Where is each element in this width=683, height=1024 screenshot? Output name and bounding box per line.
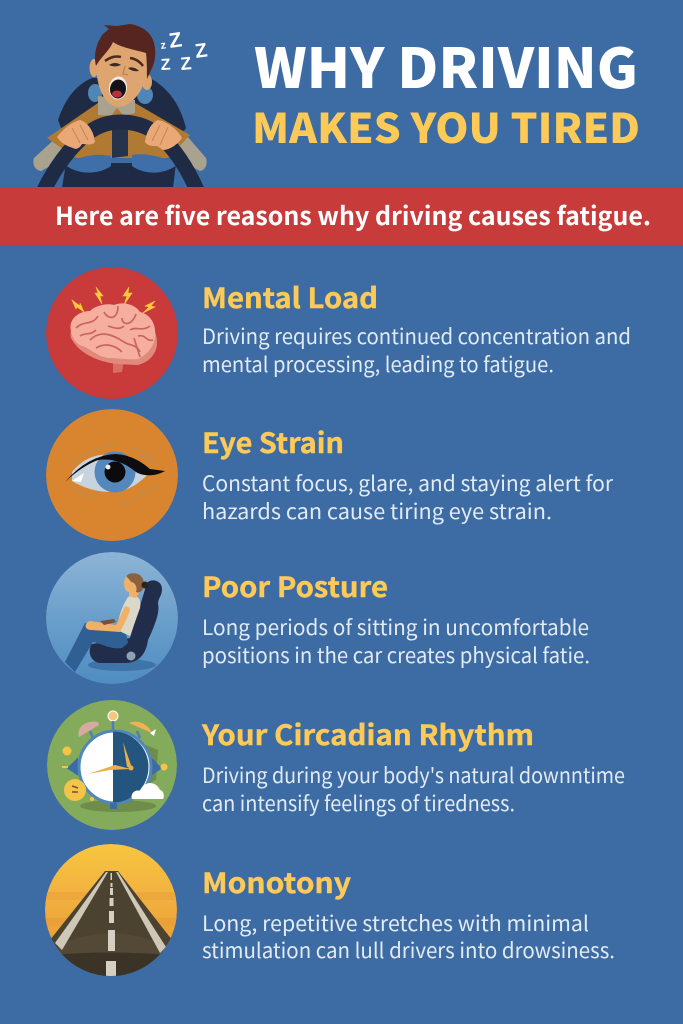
description bbox=[202, 321, 631, 379]
sleep Z marks bbox=[160, 32, 208, 70]
hands bbox=[57, 120, 95, 149]
brows and eyes bbox=[105, 56, 121, 61]
icon: seated driver bbox=[46, 552, 178, 684]
sleeves bbox=[33, 142, 62, 171]
description: Constant focus, glare, and staying alert for bbox=[202, 468, 614, 498]
heading: Your Circadian Rhythm bbox=[201, 714, 534, 754]
title: WHY DRIVING bbox=[254, 24, 638, 104]
description: Long, repetitive stretches with minimal bbox=[202, 908, 589, 938]
title: MAKES YOU TIRED bbox=[252, 95, 640, 155]
icon: straight road at sunset bbox=[45, 844, 177, 990]
description bbox=[202, 468, 614, 526]
panel: mental load bbox=[46, 267, 631, 399]
description: Driving during your body's natural downntime bbox=[202, 760, 625, 790]
bells bbox=[78, 722, 99, 737]
icon: alarm clock day and night bbox=[47, 700, 177, 830]
lightning bolts bbox=[72, 300, 84, 312]
description: positions in the car creates physical fatie. bbox=[202, 640, 590, 670]
heading: Eye Strain bbox=[202, 422, 344, 462]
lane lines bbox=[55, 872, 108, 950]
description: can intensify feelings of tiredness. bbox=[202, 788, 515, 818]
steering wheel hub bbox=[62, 163, 176, 188]
title bbox=[252, 24, 640, 155]
sleep Z marks: Z bbox=[167, 28, 184, 53]
description: mental processing, leading to fatigue. bbox=[202, 349, 554, 379]
torso bbox=[117, 596, 140, 636]
sleepy sun bbox=[64, 779, 86, 801]
collar bbox=[98, 96, 135, 116]
panel: monotony bbox=[45, 844, 615, 990]
steering wheel rim bbox=[44, 122, 197, 190]
description: stimulation can lull drivers into drowsiness. bbox=[202, 935, 615, 965]
panel: poor posture bbox=[46, 552, 590, 684]
shirt bbox=[47, 103, 190, 158]
panel: circadian rhythm bbox=[47, 700, 625, 830]
description: Long periods of sitting in uncomfortable bbox=[202, 612, 589, 642]
clock hands bbox=[88, 765, 131, 774]
car seat bbox=[58, 78, 186, 132]
panel: eye strain bbox=[46, 409, 614, 541]
legs bbox=[65, 623, 128, 672]
head bbox=[90, 24, 155, 107]
sleep Z marks: Z bbox=[160, 56, 171, 74]
heading: Poor Posture bbox=[202, 566, 388, 606]
description: Driving requires continued concentration and bbox=[202, 321, 631, 351]
description: hazards can cause tiring eye strain. bbox=[202, 496, 552, 526]
icon: eye bbox=[46, 409, 178, 541]
hair bbox=[95, 24, 155, 79]
description bbox=[202, 760, 625, 818]
sleep Z marks: Z bbox=[194, 39, 209, 63]
side wings bbox=[70, 762, 76, 772]
cloud bbox=[132, 783, 164, 799]
yawning mouth bbox=[108, 76, 128, 100]
icon: brain with lightning bolts bbox=[46, 267, 178, 399]
seat bbox=[90, 580, 162, 663]
sleep Z marks: z bbox=[160, 39, 167, 52]
description bbox=[202, 612, 590, 670]
sleep Z marks: Z bbox=[180, 53, 192, 74]
banner: Here are five reasons why driving causes fatigue. bbox=[55, 197, 651, 233]
illustration: tired driver at the wheel bbox=[33, 24, 209, 190]
head bbox=[124, 576, 140, 598]
clock face bbox=[79, 731, 151, 803]
banner bbox=[0, 187, 683, 245]
heading: Monotony bbox=[202, 862, 351, 902]
description bbox=[202, 908, 615, 965]
arm bbox=[86, 606, 130, 632]
heading: Mental Load bbox=[202, 277, 378, 317]
